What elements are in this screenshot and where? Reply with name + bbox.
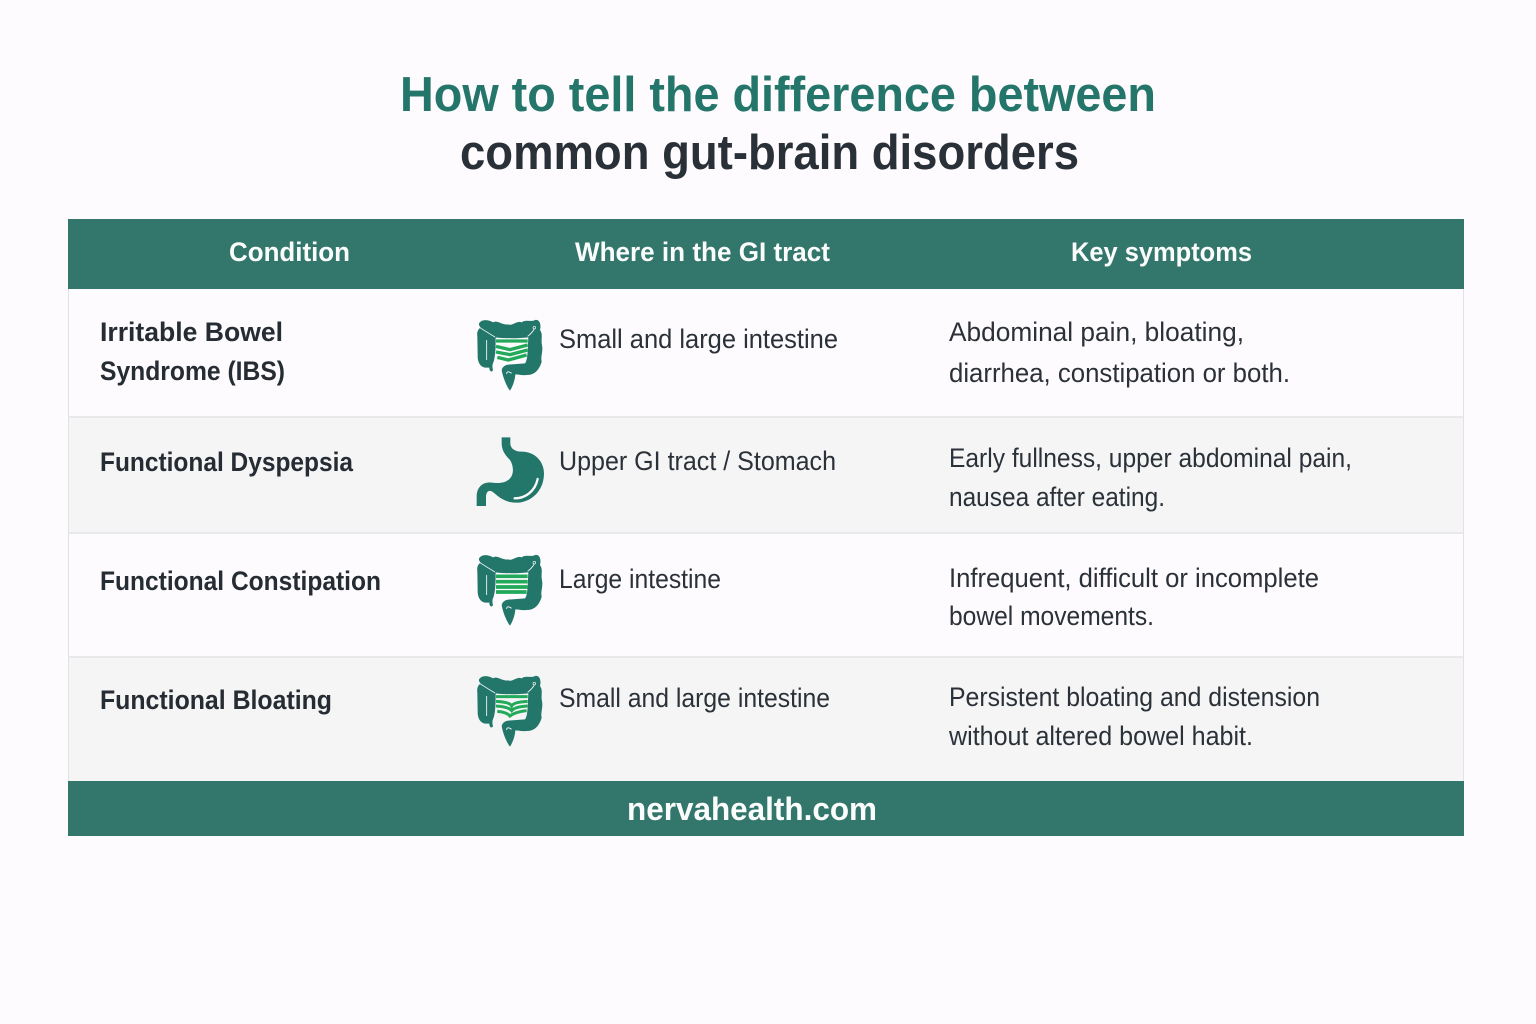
row: Irritable Bowel Syndrome: Irritable Bowel (100, 317, 283, 347)
title (400, 68, 1156, 180)
icon: intestines (477, 320, 542, 391)
row: Functional Dyspepsia: nausea after eating. (949, 482, 1165, 512)
icon: stomach (477, 437, 544, 506)
row: Functional Dyspepsia (69, 417, 1463, 533)
header row: Key symptoms (1071, 237, 1252, 267)
row: Irritable Bowel Syndrome (69, 289, 1463, 417)
header row: Condition (229, 237, 350, 267)
row: Irritable Bowel Syndrome: diarrhea, constipation or both. (949, 358, 1290, 388)
title: How to tell the difference between (400, 68, 1156, 122)
row: Functional Bloating (69, 657, 1463, 781)
footer band (68, 781, 1464, 836)
row: Functional Bloating: Persistent bloating and distension (949, 682, 1320, 712)
footer band: nervahealth.com (627, 791, 877, 827)
title: common gut-brain disorders (460, 126, 1079, 180)
row: Irritable Bowel Syndrome: Small and large intestine (559, 324, 838, 354)
row: Functional Constipation: Large intestine (559, 564, 721, 594)
header row (68, 219, 1464, 289)
row: Irritable Bowel Syndrome: Syndrome (IBS) (100, 356, 285, 386)
row: Functional Bloating: Small and large intestine (559, 683, 830, 713)
row: Functional Constipation (69, 533, 1463, 657)
icon: small and large intestine (477, 676, 542, 747)
row: Functional Dyspepsia: Upper GI tract / Stomach (559, 446, 836, 476)
row: Functional Constipation: bowel movements. (949, 601, 1154, 631)
table frame (68, 289, 1464, 781)
row: Functional Bloating: without altered bowel habit. (948, 721, 1253, 751)
row dividers (69, 417, 1463, 657)
row: Functional Dyspepsia: Functional Dyspepsia (100, 447, 354, 477)
row: Functional Dyspepsia: Early fullness, upper abdominal pain, (949, 443, 1352, 473)
row: Irritable Bowel Syndrome: Abdominal pain, bloating, (949, 317, 1244, 347)
row: Functional Constipation: Infrequent, difficult or incomplete (949, 563, 1319, 593)
icon: large intestine (477, 555, 542, 626)
row: Functional Bloating: Functional Bloating (100, 685, 332, 715)
header row: Where in the GI tract (575, 237, 830, 267)
row: Functional Constipation: Functional Constipation (100, 566, 381, 596)
